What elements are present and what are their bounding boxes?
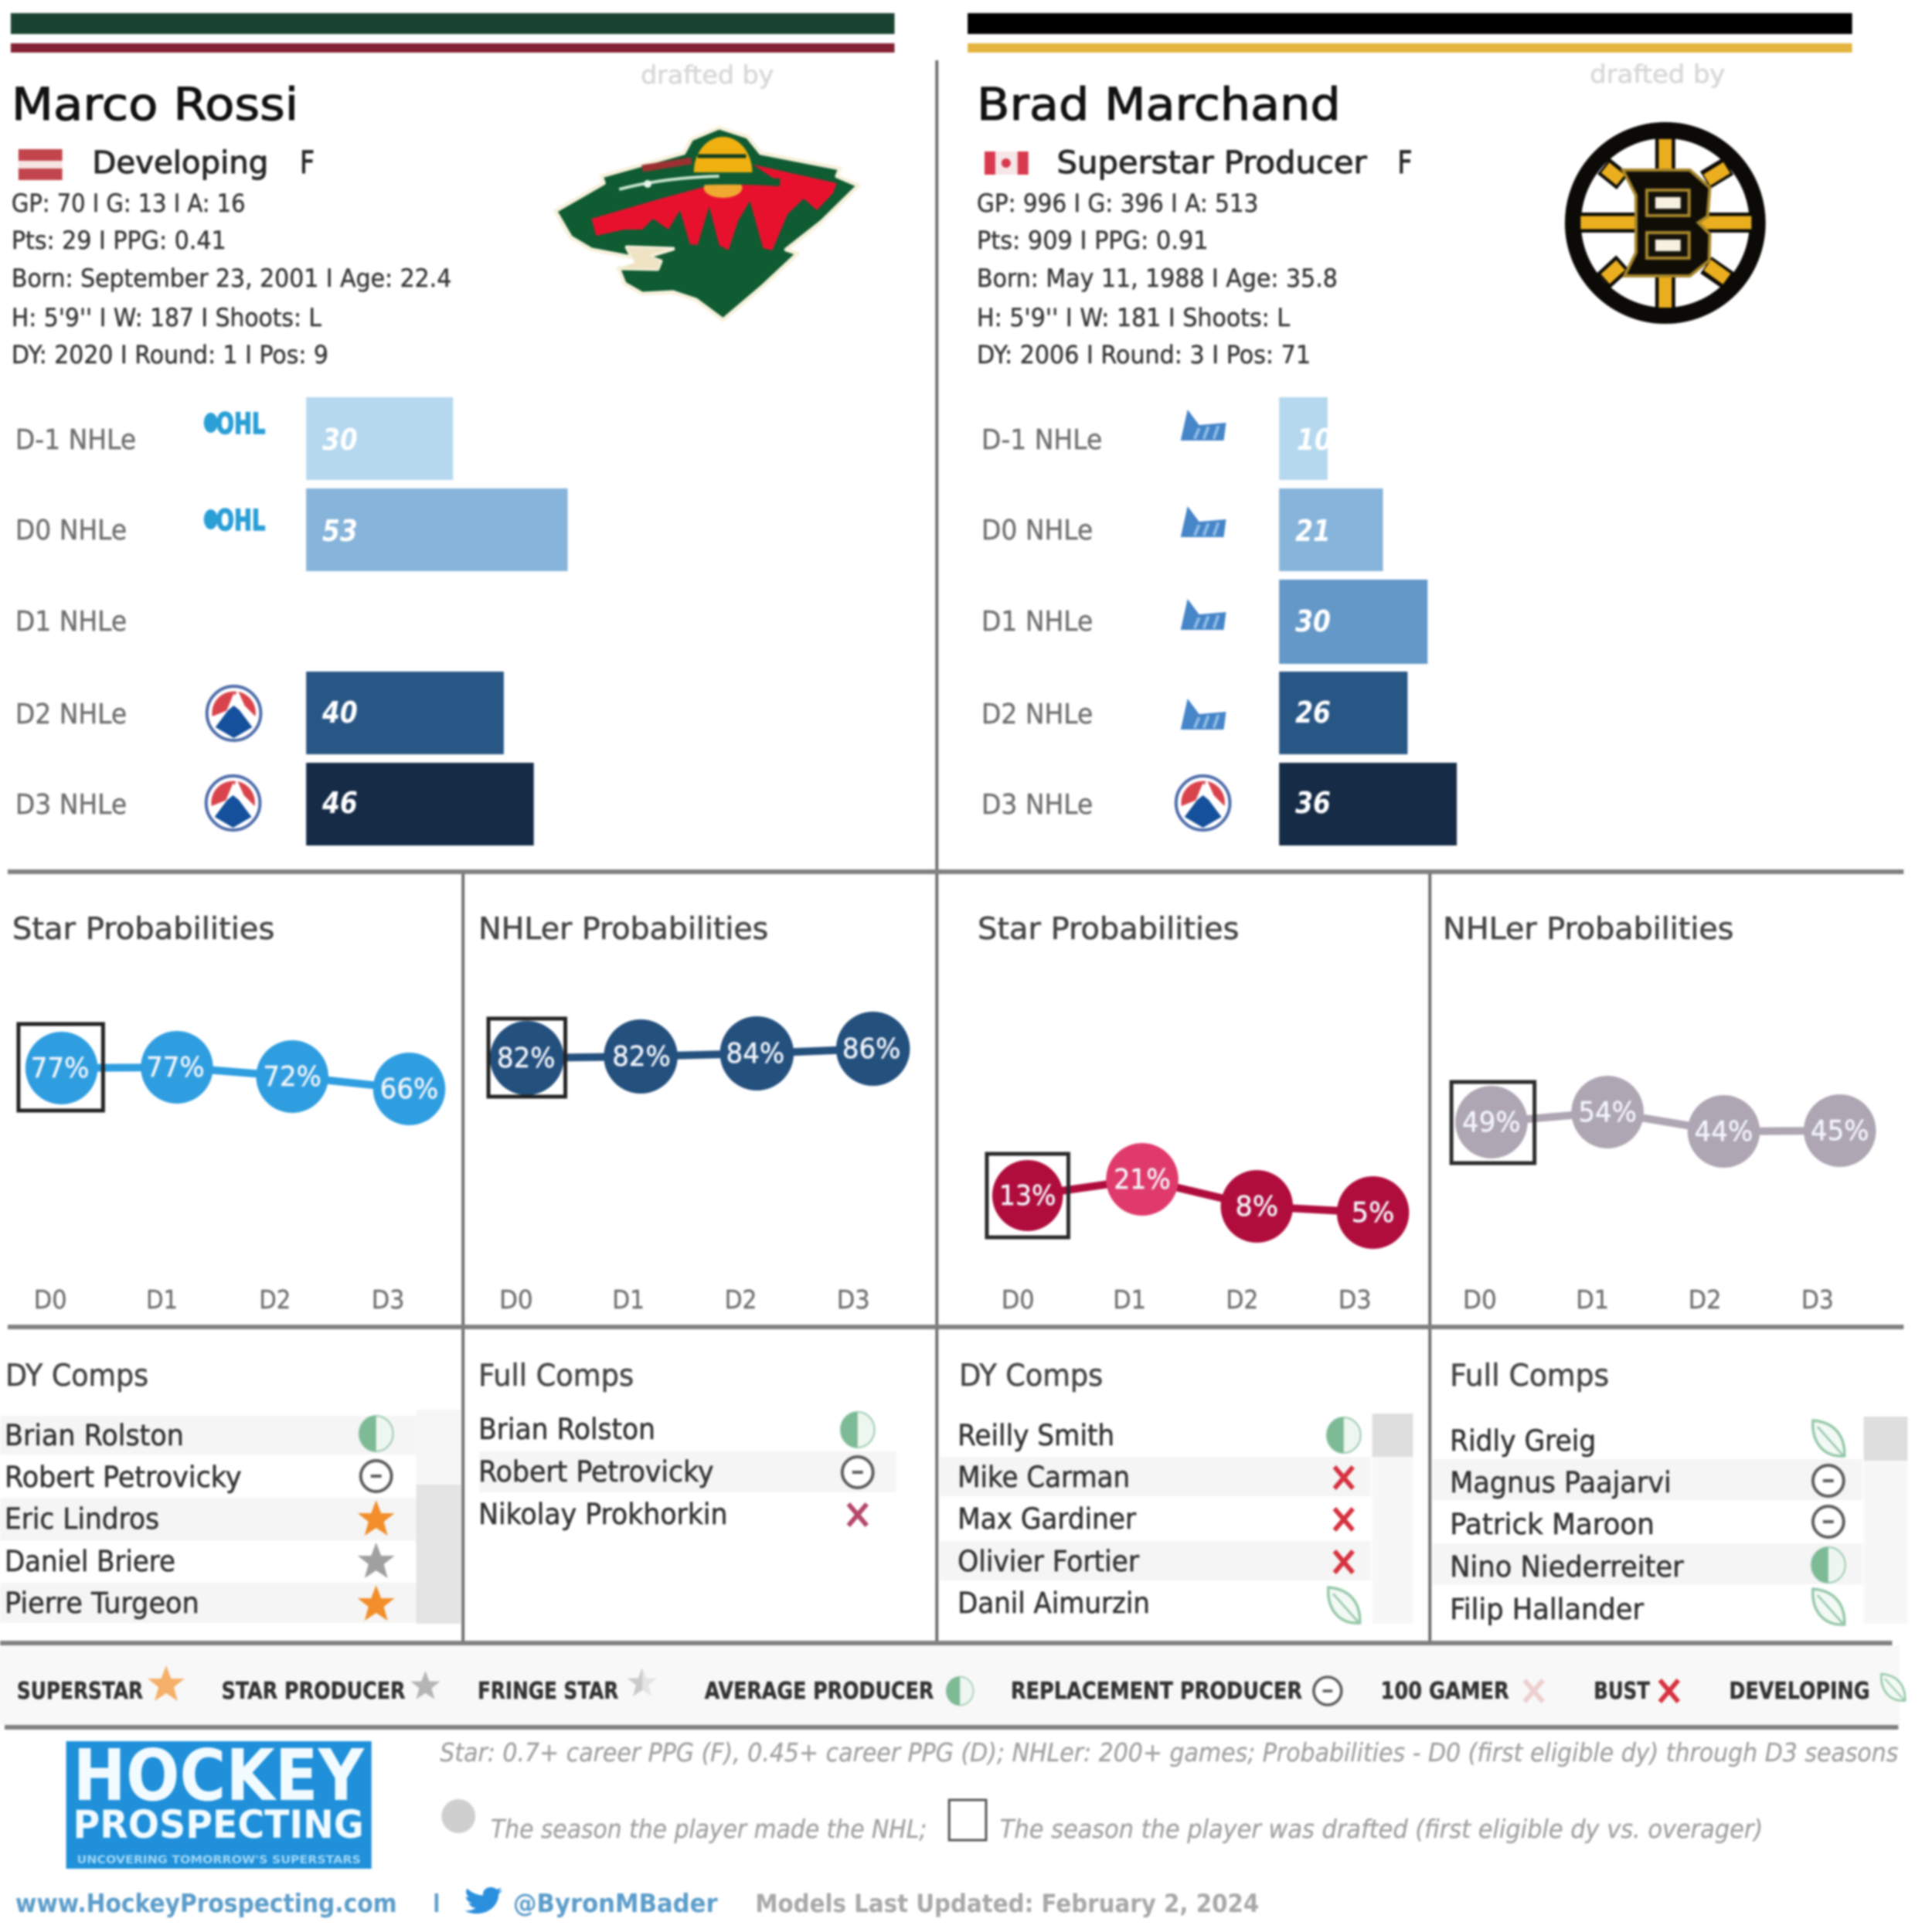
icon: Minnesota Wild logo xyxy=(556,128,859,320)
line chart: 84% xyxy=(726,1038,784,1070)
line chart: 66% xyxy=(380,1073,438,1105)
left team colour bars xyxy=(11,13,895,53)
axis labels: D1 xyxy=(1113,1284,1146,1315)
comp names xyxy=(957,1419,1150,1620)
player stats: Pts: 29 I PPG: 0.41 xyxy=(12,226,226,255)
icon: Canada flag xyxy=(985,151,1029,175)
panel: Marchand DY comps xyxy=(940,1359,1413,1624)
footer website: www.HockeyProspecting.com xyxy=(15,1888,397,1918)
Hockey Prospecting logo: PROSPECTING xyxy=(73,1802,364,1847)
Hockey Prospecting logo xyxy=(66,1734,372,1869)
line chart: 54% xyxy=(1578,1097,1637,1128)
axis labels: D3 xyxy=(1338,1284,1372,1315)
comp names: Nikolay Prokhorkin xyxy=(478,1498,728,1531)
icon: Austria flag xyxy=(19,149,63,180)
legend: FRINGE STAR xyxy=(478,1678,618,1705)
axis labels: D2 xyxy=(725,1284,757,1315)
panel: Brad Marchand profile xyxy=(977,60,1757,845)
line chart xyxy=(1451,1076,1876,1168)
line chart: 86% xyxy=(842,1033,900,1065)
bar values: 30 xyxy=(1295,604,1331,638)
row labels: D-1 NHLe xyxy=(15,424,136,456)
line chart: 77% xyxy=(146,1052,205,1084)
NHLe bar chart xyxy=(15,397,568,845)
heading: NHLer Probabilities xyxy=(478,912,768,947)
line chart: 8% xyxy=(1235,1191,1278,1223)
table row shading and scrollbar xyxy=(940,1414,1413,1624)
outcome icons xyxy=(1327,1417,1361,1623)
axis labels xyxy=(499,1284,870,1315)
row shading xyxy=(479,1451,896,1492)
footer twitter handle: @ByronMBader xyxy=(513,1888,718,1918)
axis labels: D2 xyxy=(1226,1284,1258,1315)
drafted by label: drafted by xyxy=(641,60,774,90)
comp names: Eric Lindros xyxy=(5,1502,159,1536)
player stats: GP: 996 I G: 396 I A: 513 xyxy=(977,189,1258,218)
key: drafted season xyxy=(949,1800,1763,1844)
comp names: Ridly Greig xyxy=(1450,1424,1596,1458)
league icons: OHL xyxy=(216,504,265,537)
legend: DEVELOPING xyxy=(1729,1678,1870,1705)
panel: Marchand star probabilities xyxy=(978,912,1409,1315)
comp names: Mike Carman xyxy=(957,1461,1130,1494)
row labels: D2 NHLe xyxy=(15,699,127,730)
panel: Marchand Full comps xyxy=(1433,1359,1907,1626)
projection and position: F xyxy=(300,145,315,181)
legend: BUST xyxy=(1594,1678,1650,1705)
row labels: D1 NHLe xyxy=(981,606,1093,638)
footer separator: I xyxy=(433,1888,440,1918)
line chart: 45% xyxy=(1811,1115,1869,1147)
bar values: 36 xyxy=(1295,786,1331,820)
league icons xyxy=(204,407,265,830)
comp names: Magnus Paajarvi xyxy=(1450,1466,1672,1499)
line chart xyxy=(488,1012,910,1097)
row labels: D3 NHLe xyxy=(981,789,1093,821)
bars xyxy=(306,397,568,845)
legend: SUPERSTAR xyxy=(17,1678,143,1705)
comp names xyxy=(1450,1424,1684,1626)
axis labels xyxy=(1463,1284,1834,1315)
row labels: D-1 NHLe xyxy=(981,424,1102,456)
axis labels: D2 xyxy=(259,1284,291,1315)
axis labels: D2 xyxy=(1689,1284,1721,1315)
row labels: D0 NHLe xyxy=(981,515,1093,546)
league icons: OHL xyxy=(216,407,265,441)
row labels: D3 NHLe xyxy=(15,789,127,821)
heading: Full Comps xyxy=(1450,1359,1609,1393)
key: made NHL season: The season the player made the NHL; xyxy=(491,1814,927,1844)
comp names: Brian Rolston xyxy=(478,1413,655,1446)
footer last updated: Models Last Updated: February 2, 2024 xyxy=(755,1889,1259,1918)
comp names: Robert Petrovicky xyxy=(478,1455,714,1488)
line chart: 72% xyxy=(263,1061,321,1093)
axis labels: D0 xyxy=(34,1284,67,1315)
row labels xyxy=(981,424,1102,821)
bar values: 46 xyxy=(321,786,358,820)
bars xyxy=(1279,397,1457,845)
NHLe bar chart xyxy=(981,397,1457,845)
axis labels: D1 xyxy=(612,1284,645,1315)
projection and position: Superstar Producer xyxy=(1057,145,1367,181)
player stats: H: 5'9'' I W: 181 I Shoots: L xyxy=(977,303,1290,332)
axis labels: D3 xyxy=(837,1284,870,1315)
line chart xyxy=(987,1143,1409,1249)
bar values: 10 xyxy=(1297,423,1332,457)
player stats: Born: September 23, 2001 I Age: 22.4 xyxy=(12,264,451,293)
axis labels: D3 xyxy=(372,1284,405,1315)
player name: Brad Marchand xyxy=(977,78,1341,131)
icon: twitter bird xyxy=(464,1887,502,1914)
table row shading and scrollbar xyxy=(0,1410,461,1624)
legend: STAR PRODUCER xyxy=(222,1678,406,1705)
comp names: Nino Niederreiter xyxy=(1450,1550,1684,1584)
player name: Marco Rossi xyxy=(12,78,298,131)
row labels: D1 NHLe xyxy=(15,606,127,638)
comp names: Patrick Maroon xyxy=(1450,1508,1655,1541)
heading: NHLer Probabilities xyxy=(1443,912,1733,947)
legend: 100 GAMER xyxy=(1381,1678,1509,1705)
comp names xyxy=(478,1413,728,1531)
heading: Star Probabilities xyxy=(978,912,1239,947)
panel: Marco Rossi profile xyxy=(12,60,859,845)
comp names: Max Gardiner xyxy=(957,1502,1137,1536)
axis labels: D0 xyxy=(1463,1284,1497,1315)
axis labels xyxy=(1002,1284,1372,1315)
bar values: 21 xyxy=(1295,514,1331,548)
player stats: DY: 2020 I Round: 1 I Pos: 9 xyxy=(12,340,328,369)
bar values: 30 xyxy=(322,423,358,457)
panel: Rossi DY comps xyxy=(0,1359,461,1624)
player stats: DY: 2006 I Round: 3 I Pos: 71 xyxy=(977,340,1311,369)
Hockey Prospecting logo: HOCKEY xyxy=(73,1734,365,1817)
line chart: 5% xyxy=(1352,1197,1394,1229)
league icons xyxy=(1176,410,1230,830)
axis labels: D0 xyxy=(1002,1284,1035,1315)
legend: REPLACEMENT PRODUCER xyxy=(1011,1678,1302,1705)
outcome icons xyxy=(1811,1420,1845,1625)
line chart: 44% xyxy=(1695,1116,1753,1148)
line chart: 21% xyxy=(1114,1164,1171,1196)
player stats xyxy=(12,189,451,369)
player stats: Born: May 11, 1988 I Age: 35.8 xyxy=(977,264,1338,293)
heading: DY Comps xyxy=(5,1359,148,1393)
bar values: 40 xyxy=(321,696,358,730)
panel: Rossi NHLer probabilities xyxy=(478,912,910,1315)
line chart: 82% xyxy=(497,1043,556,1074)
line chart: 49% xyxy=(1462,1107,1521,1138)
comp names: Olivier Fortier xyxy=(957,1545,1140,1578)
player stats: GP: 70 I G: 13 I A: 16 xyxy=(12,189,246,218)
panel: Rossi star probabilities xyxy=(12,912,445,1315)
comp names: Reilly Smith xyxy=(957,1419,1114,1452)
bar values xyxy=(321,423,358,820)
row labels: D0 NHLe xyxy=(15,515,127,546)
key: made NHL season xyxy=(441,1799,927,1844)
heading: DY Comps xyxy=(959,1359,1103,1393)
axis labels: D0 xyxy=(499,1284,533,1315)
row labels: D2 NHLe xyxy=(981,699,1093,730)
Hockey Prospecting logo: UNCOVERING TOMORROW'S SUPERSTARS xyxy=(77,1854,361,1866)
line chart: 82% xyxy=(612,1041,671,1073)
line chart xyxy=(19,1024,445,1125)
player stats: Pts: 909 I PPG: 0.91 xyxy=(977,226,1209,255)
row labels xyxy=(15,424,136,821)
comp names: Daniel Briere xyxy=(5,1545,175,1578)
axis labels: D1 xyxy=(1576,1284,1609,1315)
bar values xyxy=(1295,423,1332,820)
icon: Boston Bruins logo xyxy=(1573,130,1757,315)
right team colour bars xyxy=(968,13,1852,53)
projection and position: Developing xyxy=(92,145,268,181)
heading: Star Probabilities xyxy=(12,912,274,947)
projection and position: F xyxy=(1397,145,1412,181)
drafted by label: drafted by xyxy=(1590,60,1725,89)
heading: Full Comps xyxy=(478,1359,634,1393)
bar values: 26 xyxy=(1295,696,1331,730)
axis labels xyxy=(34,1284,405,1315)
line chart: 13% xyxy=(999,1180,1056,1212)
axis labels: D1 xyxy=(146,1284,178,1315)
player stats: H: 5'9'' I W: 187 I Shoots: L xyxy=(12,303,321,332)
outcome icons xyxy=(841,1412,875,1526)
panel: Marchand NHLer probabilities xyxy=(1443,912,1876,1315)
comp names xyxy=(5,1419,242,1620)
comp names: Danil Aimurzin xyxy=(957,1587,1150,1620)
legend: AVERAGE PRODUCER xyxy=(705,1678,934,1705)
key: drafted season: The season the player was drafted (first eligible dy vs. overager) xyxy=(1000,1814,1763,1844)
comp names: Pierre Turgeon xyxy=(5,1587,199,1620)
axis labels: D3 xyxy=(1801,1284,1834,1315)
line chart: 77% xyxy=(31,1053,89,1084)
comp names: Brian Rolston xyxy=(5,1419,184,1452)
comp names: Robert Petrovicky xyxy=(5,1461,242,1494)
outcome icons xyxy=(358,1416,395,1621)
panel: Rossi Full comps xyxy=(478,1359,896,1531)
legend xyxy=(0,1645,1905,1725)
comp names: Filip Hallander xyxy=(1450,1593,1645,1626)
player stats xyxy=(977,189,1338,369)
table row shading and scrollbar xyxy=(1433,1417,1907,1624)
bar values: 53 xyxy=(322,514,358,548)
